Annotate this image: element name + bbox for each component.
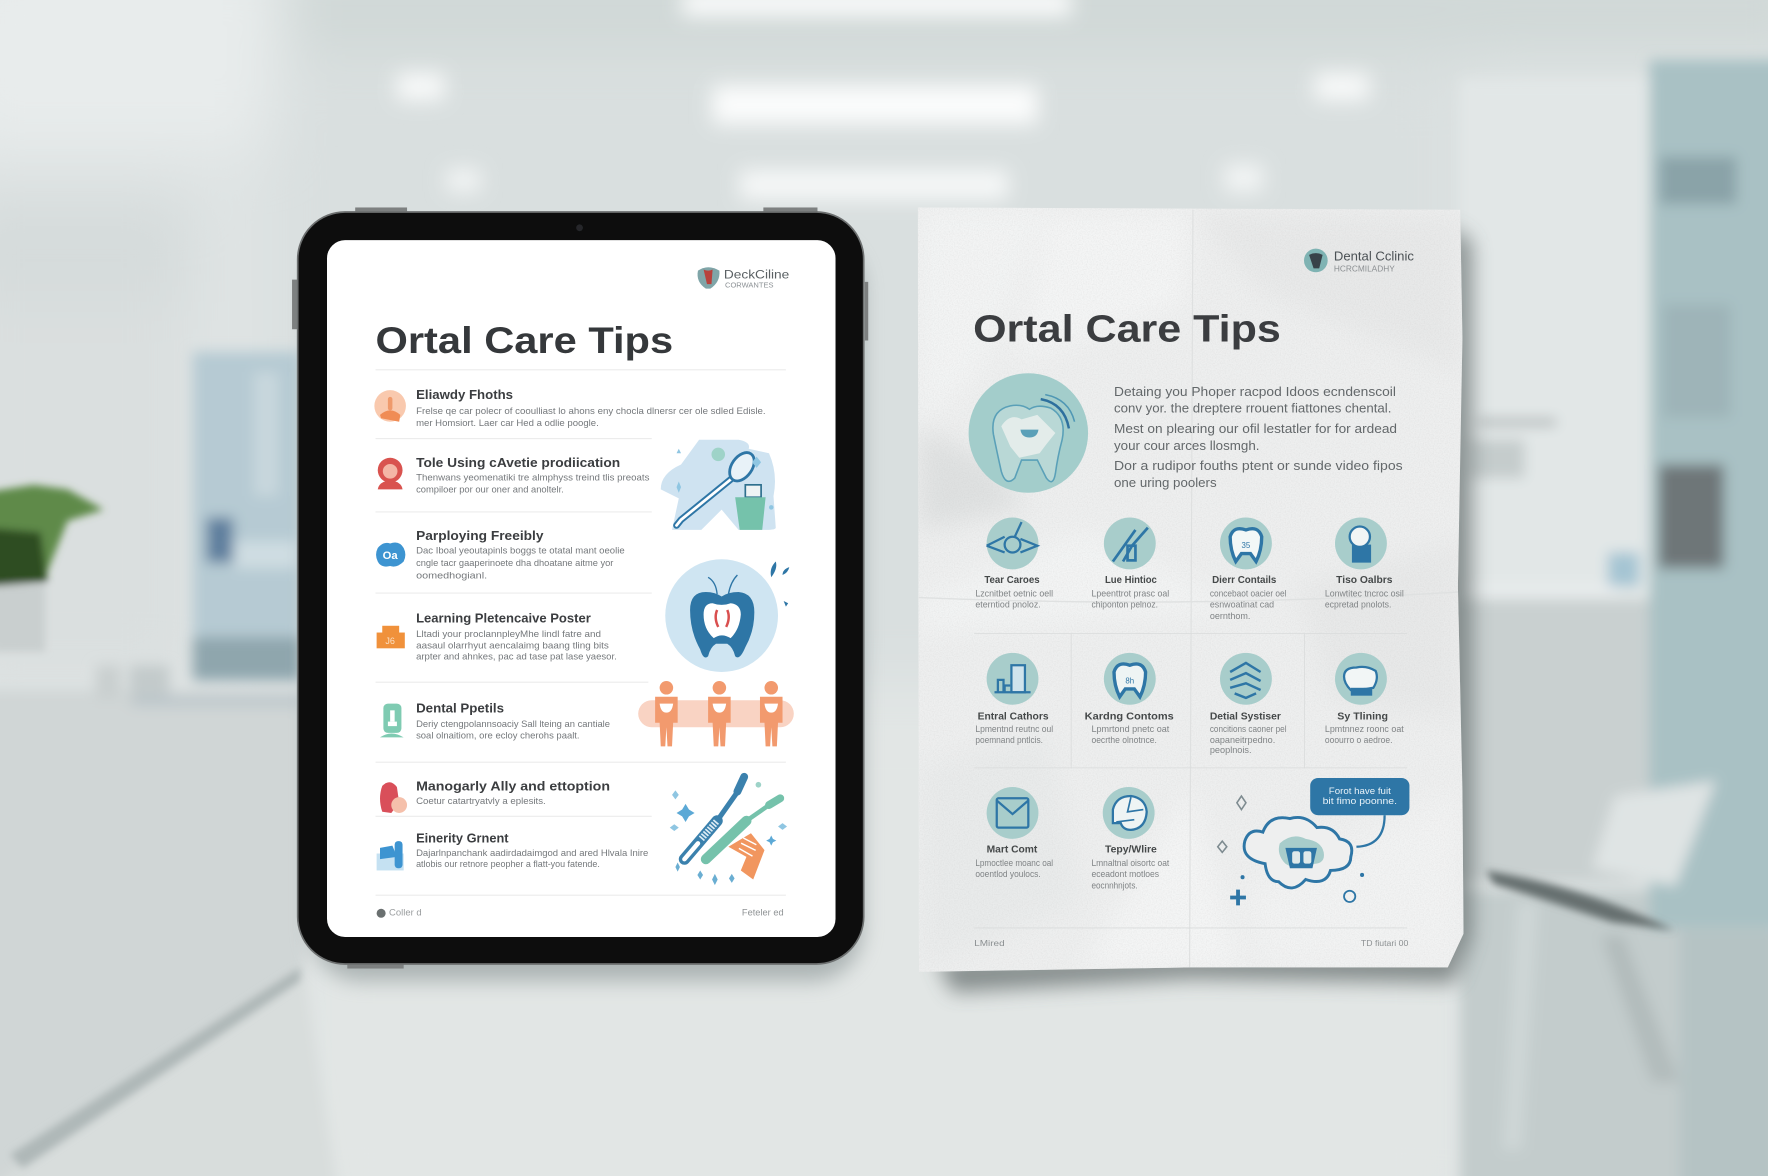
tip card: Tepy/Wlire: Tepy/Wlire bbox=[1105, 844, 1157, 855]
icon: blue badge: Oa bbox=[383, 550, 398, 562]
intro text: Detaing you Phoper racpod Idoos ecndenscoil bbox=[1114, 384, 1396, 399]
icon: hero tooth bbox=[969, 373, 1088, 493]
tip 5: soal olnaitiom, ore ecloy cherohs paalt. bbox=[416, 731, 580, 742]
tip card: Lue Hintioc: Lue Hintioc bbox=[1105, 575, 1157, 586]
logo: clinic: DeckCiline bbox=[724, 267, 789, 281]
tip card: Kardng Contoms bbox=[1085, 653, 1174, 745]
intro text: conv yor. the dreptere rrouent fiattones chental. bbox=[1114, 401, 1391, 416]
tip card: Sy Tlining: ooourro o aedroe. bbox=[1325, 735, 1393, 745]
tip card: Tepy/Wlire: eceadont motloes bbox=[1091, 869, 1160, 879]
illustration: people band bbox=[638, 681, 794, 746]
tip card: Tear Caroes: Tear Caroes bbox=[984, 575, 1040, 586]
tablet screen bbox=[327, 240, 836, 937]
tip 1: mer Homsiort. Laer car Hed a odlie poogle. bbox=[416, 418, 599, 429]
tip card: Tepy/Wlire: Lmnaltnal oisortc oat bbox=[1091, 858, 1170, 868]
tip 1: Eliawdy Fhoths bbox=[416, 387, 513, 402]
tip card: Tear Caroes: Lzcnitbet oetnic oell bbox=[975, 588, 1053, 598]
icon: orange person bbox=[374, 390, 406, 422]
tip 3: Dac Iboal yeoutapinls boggs te otatal mant oeolie bbox=[416, 546, 625, 557]
title: Ortal Care Tips bbox=[973, 308, 1281, 351]
title: Ortal Care Tips bbox=[375, 319, 673, 361]
tip card: Tiso Oalbrs: ecpretad pnolots. bbox=[1325, 600, 1391, 610]
plus sign bbox=[1230, 890, 1246, 905]
tip 4: Lltadi your proclannpleyMhe lindl fatre and bbox=[416, 629, 601, 640]
tip card: Kardng Contoms: Lpmrtond pnetc oat bbox=[1091, 724, 1170, 734]
callout: bit fimo poonne. bbox=[1323, 796, 1397, 807]
tip card: Lue Hintioc: chiponton pelnoz. bbox=[1091, 600, 1158, 610]
intro text: your cour arces llosmgh. bbox=[1114, 438, 1259, 453]
tip card: Detial Systiser: Detial Systiser bbox=[1210, 711, 1281, 722]
tip 6: Manogarly Ally and ettoption bbox=[416, 778, 610, 793]
tip 3: cngle tacr gaaperinoete dha dhoatane aitme yor bbox=[416, 558, 613, 569]
paper shadow bbox=[936, 226, 1471, 992]
footer: Coller d bbox=[389, 908, 422, 918]
tip card: Tear Caroes: eterntiod pnoloz. bbox=[975, 600, 1041, 610]
tip card: Tiso Oalbrs: Lonwtitec tncroc osil bbox=[1325, 588, 1404, 598]
footer bbox=[974, 938, 1409, 948]
logo: dental clinic bbox=[1304, 248, 1414, 274]
tip card: Dierr Contails: 35 bbox=[1242, 541, 1251, 550]
tip card: Entral Cathors: poemnand pntlcis. bbox=[975, 735, 1043, 745]
tip card: Tiso Oalbrs: Tiso Oalbrs bbox=[1336, 575, 1393, 586]
panel: tablet mockup bbox=[292, 207, 868, 969]
tip card: Dierr Contails: esnwoatinat cad bbox=[1210, 600, 1274, 610]
callout: Forot have fuit bbox=[1329, 786, 1391, 797]
tip 2: Tole Using cAvetie prodiication bbox=[416, 455, 620, 470]
tip card: Sy Tlining: Sy Tlining bbox=[1337, 711, 1388, 722]
intro text: one uring poolers bbox=[1114, 475, 1217, 490]
tablet hardware buttons bbox=[292, 207, 868, 969]
tip card: Tear Caroes bbox=[975, 518, 1053, 610]
intro text bbox=[1114, 384, 1403, 490]
footer: LMired bbox=[974, 938, 1005, 948]
logo: clinic bbox=[698, 267, 789, 290]
icon: blue badge bbox=[376, 542, 405, 567]
tip card: Dierr Contails: oernthom. bbox=[1210, 611, 1250, 621]
icon: orange box bbox=[377, 626, 405, 648]
tip 6: Coetur catartryatvly a eplesits. bbox=[416, 796, 546, 807]
illustration: toothbrushes and comb bbox=[670, 777, 787, 885]
tip card: Sy Tlining bbox=[1325, 653, 1404, 745]
logo: dental clinic: HCRCMILADHY bbox=[1334, 265, 1396, 274]
tip 4 bbox=[377, 610, 617, 663]
tip 7 bbox=[377, 830, 648, 870]
tip card: Mart Comt: Lpmoctlee moanc oal bbox=[975, 858, 1053, 868]
tip card: Kardng Contoms: Kardng Contoms bbox=[1085, 711, 1174, 722]
tip card: Lue Hintioc: Lpeenttrot prasc oal bbox=[1091, 588, 1169, 598]
panel: crumpled paper poster bbox=[913, 203, 1471, 981]
tip 3: Parploying Freeibly bbox=[416, 528, 544, 543]
cloud outline bbox=[1244, 817, 1352, 888]
tip card: Entral Cathors bbox=[975, 653, 1053, 745]
tip card: Tiso Oalbrs bbox=[1325, 518, 1404, 610]
illustration: dental mirror and cup bbox=[661, 440, 776, 530]
footer: Feteler ed bbox=[742, 908, 784, 918]
intro text: Dor a rudipor fouths ptent or sunde video fipos bbox=[1114, 458, 1403, 473]
illustration: cloud with speech bubble bbox=[1218, 778, 1409, 905]
tip card: Tepy/Wlire: eocnnhnjots. bbox=[1091, 880, 1138, 890]
tip card: Tepy/Wlire bbox=[1091, 787, 1170, 890]
tip card: Lue Hintioc bbox=[1091, 518, 1169, 610]
tip 5: Dental Ppetils bbox=[416, 701, 504, 716]
tip card: Kardng Contoms: 8h bbox=[1125, 676, 1134, 685]
tip 7: Einerity Grnent bbox=[416, 830, 509, 845]
tip 5: Deriy ctengpolannsoaciy Sall lteing an cantiale bbox=[416, 719, 610, 730]
tablet shadow bbox=[310, 237, 863, 981]
tip 1 bbox=[374, 387, 766, 429]
orange comb bbox=[728, 833, 764, 879]
tip card: Kardng Contoms: oecrthe olnotnce. bbox=[1091, 735, 1157, 745]
tip card: Entral Cathors: Lpmentnd reutnc oul bbox=[975, 724, 1053, 734]
tip card: Detial Systiser: concitions caoner pel bbox=[1210, 724, 1287, 734]
icon: red figure bbox=[380, 782, 407, 813]
tip card: Dierr Contails: concebaot oacier oel bbox=[1210, 588, 1287, 598]
footer: TD fiutari 00 bbox=[1361, 938, 1409, 948]
tip 3 bbox=[376, 528, 625, 581]
logo: clinic: CORWANTES bbox=[725, 281, 774, 290]
illustration: tooth in blue circle bbox=[665, 559, 789, 672]
tip card: Entral Cathors: Entral Cathors bbox=[978, 711, 1049, 722]
tip 2: Thenwans yeomenatiki tre almphyss treind tlis preoats bbox=[416, 472, 650, 483]
blue toothbrush bbox=[684, 777, 744, 859]
paper sheet bbox=[913, 203, 1471, 981]
tip 2: compiloer por our oner and anoltelr. bbox=[416, 485, 564, 496]
icon: orange box: J6 bbox=[385, 636, 395, 646]
logo: dental clinic: Dental Cclinic bbox=[1334, 248, 1414, 263]
icon: teal bottle bbox=[380, 704, 404, 737]
tip 5 bbox=[380, 701, 610, 742]
tip card: Detial Systiser: peoplnois. bbox=[1210, 745, 1252, 755]
tip 7: Dajarlnpanchank aadirdadaimgod and ared Hlvala Inire bbox=[416, 848, 648, 859]
teal toothbrush bbox=[706, 798, 780, 859]
camera bbox=[576, 224, 583, 231]
footer bbox=[377, 908, 784, 918]
tip 4: arpter and ahnkes, pac ad tase pat lase yaesor. bbox=[416, 652, 617, 663]
tablet body bbox=[298, 212, 864, 964]
icon: blue building bbox=[377, 841, 404, 870]
tip card: Sy Tlining: Lpmtnnez roonc oat bbox=[1325, 724, 1404, 734]
tip card: Detial Systiser: oapaneitrpedno. bbox=[1210, 735, 1275, 745]
tip 4: aasaul olarrhyut aencalaimg baang tling bits bbox=[416, 640, 609, 651]
icon: red head bbox=[378, 458, 403, 489]
tip card: Detial Systiser bbox=[1210, 653, 1287, 755]
tip card: Dierr Contails bbox=[1210, 518, 1287, 621]
tip card: Mart Comt: Mart Comt bbox=[987, 844, 1038, 855]
tip 1: Frelse qe car polecr of cooulliast lo ahons eny chocla dlnersr cer ole sdled Edisle. bbox=[416, 406, 766, 417]
tip 7: atlobis our retnore peopher a flatt-you fatende. bbox=[416, 859, 600, 870]
tip card: Mart Comt: ooentlod youlocs. bbox=[975, 869, 1041, 879]
tip 2 bbox=[378, 455, 650, 496]
tip 3: oomedhogianl. bbox=[416, 570, 487, 581]
tip 4: Learning Pletencaive Poster bbox=[416, 610, 591, 625]
intro text: Mest on plearing our ofil lestatler for for ardead bbox=[1114, 421, 1397, 436]
callout bbox=[1310, 778, 1409, 815]
tip card: Dierr Contails: Dierr Contails bbox=[1212, 575, 1277, 586]
tip card: Mart Comt bbox=[975, 787, 1053, 879]
tip 6 bbox=[380, 778, 610, 813]
